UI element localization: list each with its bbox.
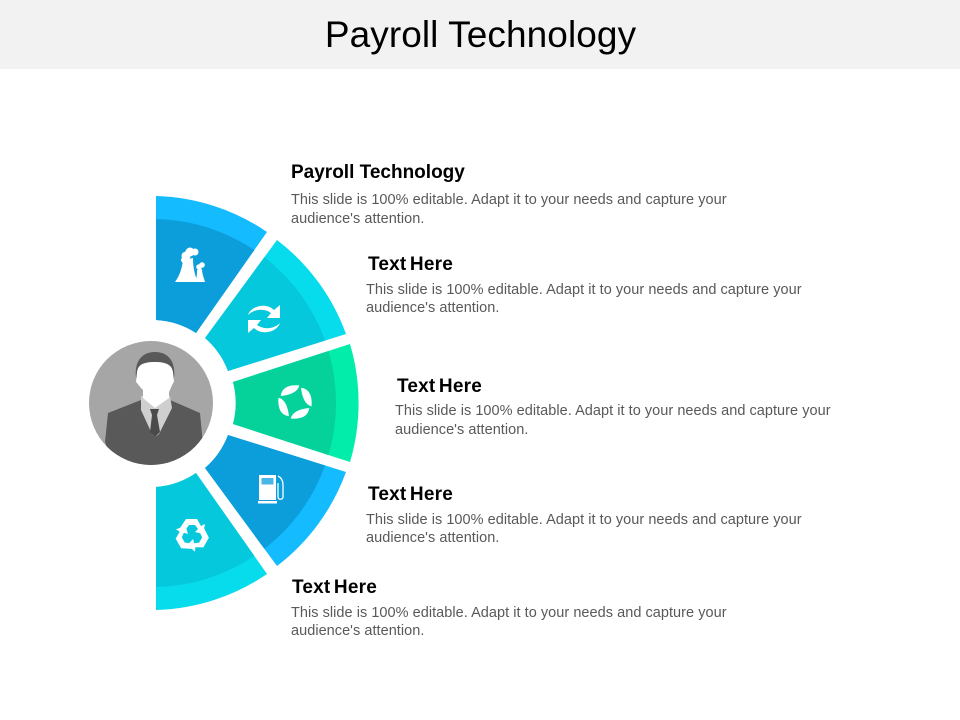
icon: fuel pump [258, 475, 283, 504]
text block 3: Text Here [397, 376, 482, 397]
text block 5 [291, 577, 727, 639]
segment 3 [233, 344, 359, 462]
title: Payroll Technology [325, 14, 636, 55]
text block 5: audience's attention. [291, 623, 424, 639]
text block 2: Text Here [368, 254, 453, 275]
icon: businessman avatar [89, 341, 213, 470]
header band [0, 0, 960, 69]
text block 1: Payroll Technology [291, 162, 465, 183]
icon: refresh arrows [248, 305, 280, 333]
text block 1 [291, 162, 727, 227]
text block 3: This slide is 100% editable. Adapt it to your needs and capture your [395, 403, 831, 419]
text block 2: This slide is 100% editable. Adapt it to your needs and capture your [366, 282, 802, 298]
segment 1 [156, 196, 267, 333]
text block 4: This slide is 100% editable. Adapt it to your needs and capture your [366, 512, 802, 528]
icon: leaves [276, 383, 314, 421]
text block 1: audience's attention. [291, 211, 424, 227]
segment 2 [205, 240, 346, 371]
text block 2 [366, 254, 802, 316]
icon: recycle [172, 519, 212, 554]
text block 2: audience's attention. [366, 300, 499, 316]
text block 4: audience's attention. [366, 530, 499, 546]
segment 4 [205, 435, 346, 566]
text block 1: This slide is 100% editable. Adapt it to your needs and capture your [291, 192, 727, 208]
text block 4: Text Here [368, 484, 453, 505]
text block 4 [366, 484, 802, 546]
icon: cooling towers [175, 248, 205, 282]
text block 5: This slide is 100% editable. Adapt it to your needs and capture your [291, 605, 727, 621]
semicircle diagram [89, 196, 359, 610]
segment 5 [156, 473, 267, 610]
text block 3 [395, 376, 831, 438]
text block 3: audience's attention. [395, 422, 528, 438]
text block 5: Text Here [292, 577, 377, 598]
